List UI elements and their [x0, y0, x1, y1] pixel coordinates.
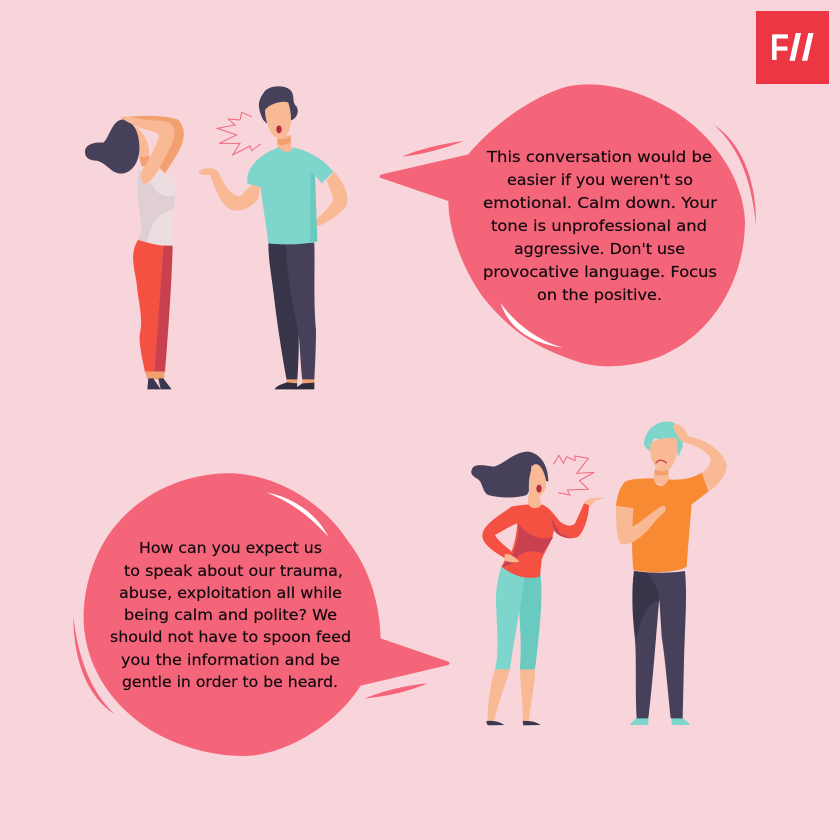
bubble text: This conversation would be	[486, 148, 712, 166]
woman two	[471, 452, 605, 725]
bubble text: abuse, exploitation all while	[119, 584, 342, 602]
speech bubble: bottom	[73, 473, 450, 756]
bubble text: emotional. Calm down. Your	[483, 194, 718, 212]
bubble text: being calm and polite? We	[124, 606, 337, 624]
shout burst	[553, 455, 594, 495]
bubble text	[110, 539, 351, 691]
logo: F//	[756, 11, 829, 84]
bubble text: How can you expect us	[139, 539, 322, 557]
man two	[616, 421, 727, 725]
speech bubble: top	[379, 84, 756, 366]
bubble text: tone is unprofessional and	[491, 217, 707, 235]
shout burst	[217, 112, 261, 155]
logo: F//: //	[789, 27, 814, 68]
logo: F//: F	[770, 27, 789, 68]
man one	[199, 86, 348, 389]
bubble text: aggressive. Don't use	[514, 240, 685, 258]
bubble text	[483, 148, 718, 304]
bubble shape	[379, 84, 745, 366]
bubble text: to speak about our trauma,	[124, 562, 343, 580]
accent strokes	[402, 125, 756, 348]
bubble text: you the information and be	[121, 651, 340, 669]
illustration: woman shouting and pointing at confused man	[471, 421, 727, 725]
bubble shape	[84, 473, 450, 756]
bubble text: easier if you weren't so	[507, 171, 693, 189]
bubble text: on the positive.	[537, 286, 662, 304]
bubble text: provocative language. Focus	[483, 263, 717, 281]
accent strokes	[73, 492, 428, 714]
woman one	[85, 116, 184, 389]
illustration: woman turning away and man speaking	[85, 86, 348, 389]
bubble text: gentle in order to be heard.	[122, 673, 338, 691]
bubble text: should not have to spoon feed	[110, 628, 351, 646]
